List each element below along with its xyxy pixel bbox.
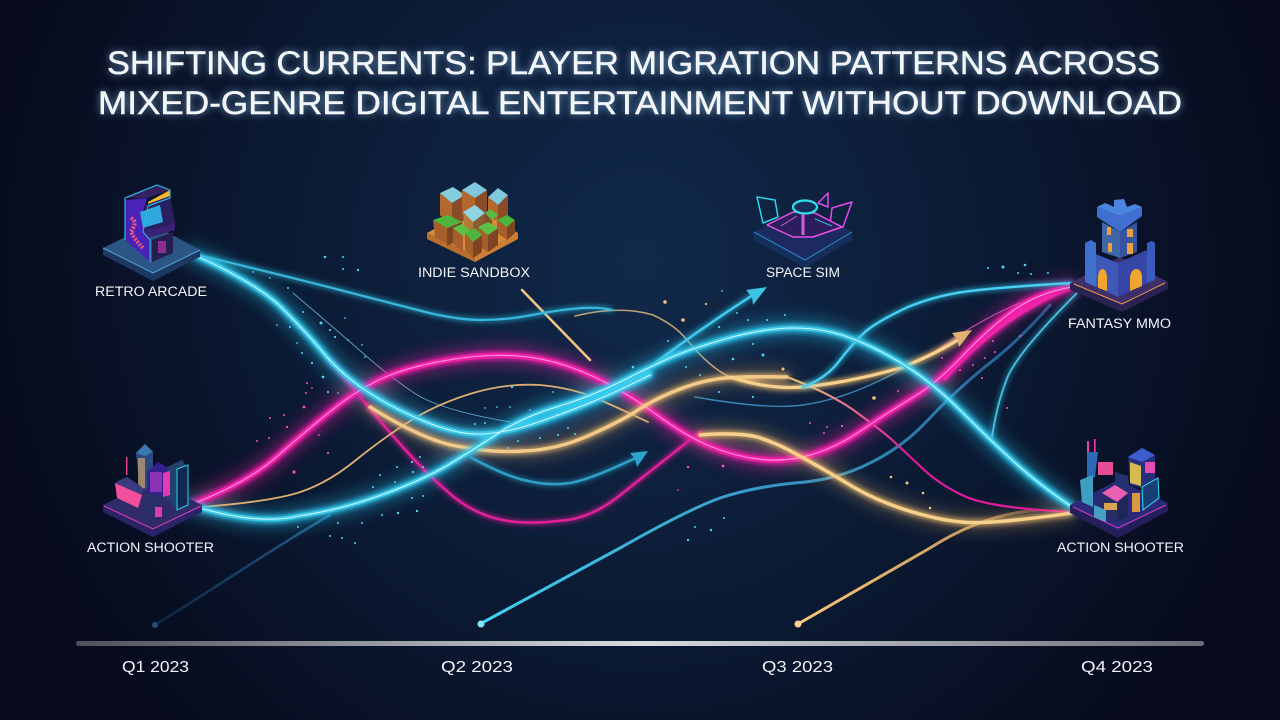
title: SHIFTING CURRENTS: PLAYER MIGRATION PATTERNS ACROSS [107,45,1160,81]
label: q1: Q1 2023 [122,659,189,676]
label: q2: Q2 2023 [441,659,513,676]
title [98,45,1182,121]
icon: fantasy castle [1070,199,1168,312]
timeline labels [122,659,1153,676]
arrow: gold [952,330,972,347]
glow layer [190,253,1072,523]
label: q3: Q3 2023 [762,659,833,676]
label: fantasy mmo: FANTASY MMO [1068,316,1171,331]
icon: action shooter left [103,444,202,537]
arrow: lower cyan [630,451,648,467]
timeline bar [76,641,1204,646]
migration flow streams [155,253,1077,625]
cyan streams [190,253,1077,519]
thin faint streams [155,293,1050,625]
label: q4: Q4 2023 [1081,659,1153,676]
label: retro arcade: RETRO ARCADE [95,284,207,299]
arrowheads [630,287,972,467]
icon: space sim [754,193,852,268]
gold streams [200,290,1072,523]
timeline start dots [152,620,802,628]
title: MIXED-GENRE DIGITAL ENTERTAINMENT WITHOUT DOWNLOAD [98,85,1182,121]
label: action shooter left: ACTION SHOOTER [87,540,214,555]
title: SHIFTING CURRENTS: PLAYER MIGRATION PATTERNS ACROSS [107,45,1160,81]
icon: indie sandbox [427,182,518,262]
label: action shooter right: ACTION SHOOTER [1057,540,1184,555]
arrow: to space sim [746,287,767,305]
particles [252,256,1049,544]
icon: retro arcade [103,185,200,281]
label: indie sandbox: INDIE SANDBOX [418,265,530,280]
title: MIXED-GENRE DIGITAL ENTERTAINMENT WITHOUT DOWNLOAD [98,85,1182,121]
icon: action shooter right [1070,439,1168,538]
magenta streams [190,287,1072,523]
label: space sim: SPACE SIM [766,265,840,280]
